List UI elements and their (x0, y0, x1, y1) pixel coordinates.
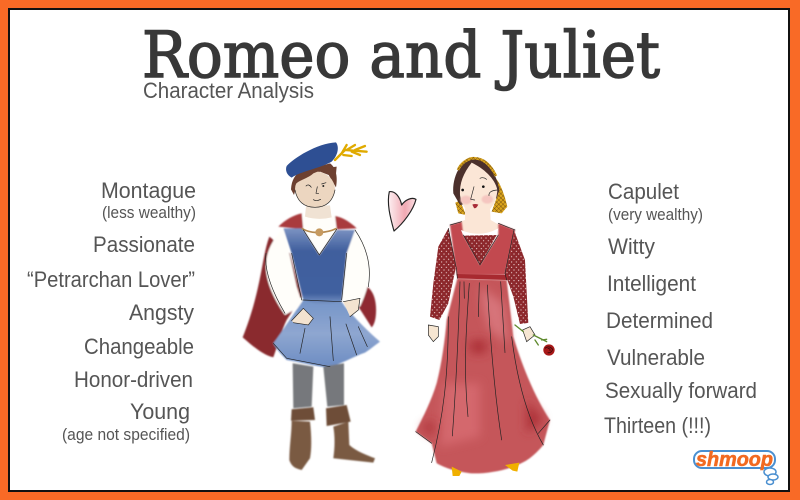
Romeo traits list: “Petrarchan Lover” (27, 267, 195, 292)
Romeo traits list: Young (130, 399, 190, 424)
Romeo traits list: Angsty (129, 300, 194, 325)
logo: shmoop (694, 449, 778, 484)
title: Romeo and Juliet (142, 19, 660, 93)
Juliet traits list: Capulet (608, 179, 679, 204)
Juliet traits list: Thirteen (!!!) (604, 413, 711, 438)
Romeo traits list (27, 178, 196, 444)
Juliet traits list: Vulnerable (607, 345, 705, 370)
Romeo traits list: Honor-driven (74, 367, 193, 392)
Juliet traits list: Sexually forward (605, 378, 757, 403)
logo: shmoop: shmoop (696, 449, 773, 471)
subtitle: Character Analysis (143, 78, 314, 103)
illustration: Romeo (243, 142, 380, 470)
Juliet traits list: Determined (606, 308, 713, 333)
Juliet traits list: (very wealthy) (608, 206, 703, 224)
Romeo traits list: (less wealthy) (102, 204, 196, 222)
Romeo traits list: Changeable (84, 334, 194, 359)
Juliet traits list: Intelligent (607, 271, 696, 296)
illustration: Juliet (416, 158, 555, 476)
Romeo traits list: Passionate (93, 232, 195, 257)
Romeo traits list: Montague (101, 178, 196, 203)
icon: heart (388, 192, 416, 231)
Romeo traits list: (age not specified) (62, 426, 190, 444)
Juliet traits list (604, 179, 757, 438)
Juliet traits list: Witty (608, 234, 655, 259)
